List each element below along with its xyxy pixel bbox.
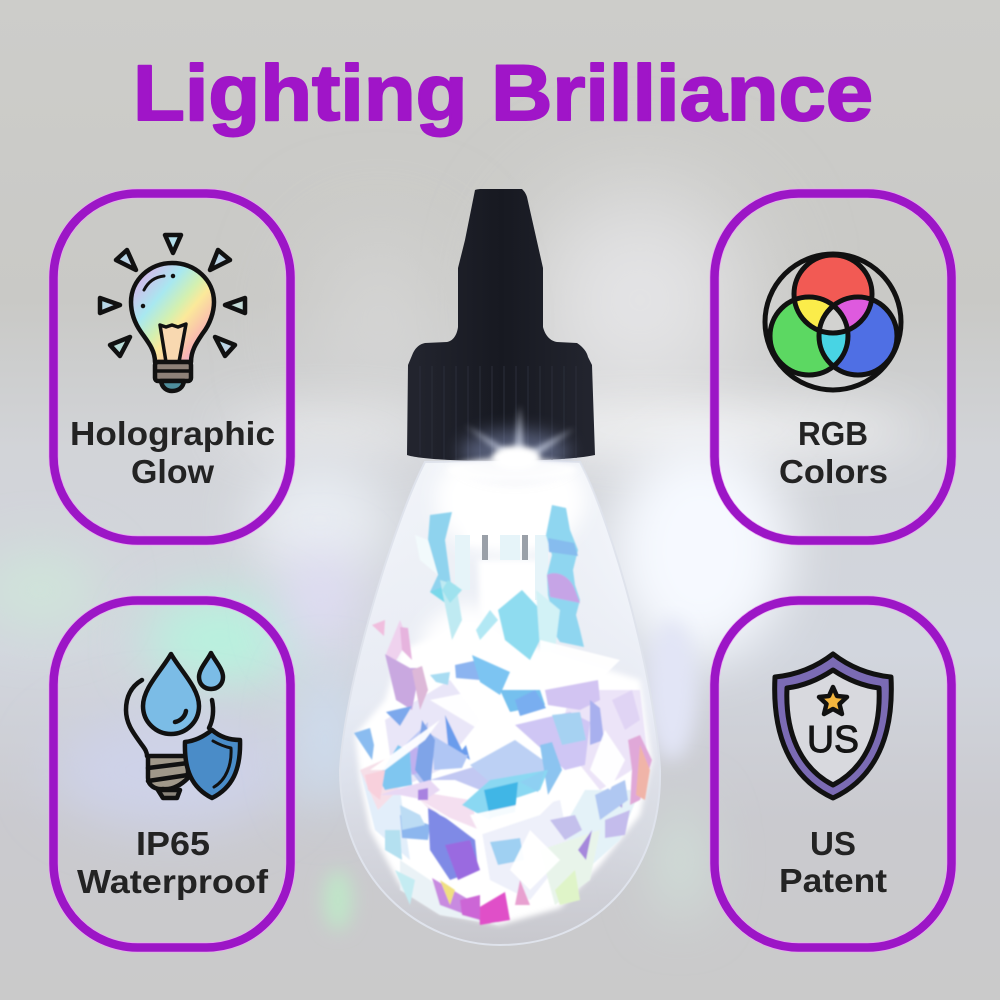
icon: RGB circles [765, 254, 901, 390]
panel: RGB colors [714, 194, 952, 540]
label: Holographic [70, 415, 275, 452]
label: IP65 [136, 825, 210, 862]
icon: waterproof bulb [126, 653, 240, 798]
LED pins [482, 535, 488, 560]
LED glare [447, 405, 577, 482]
icon: US shield: US [807, 719, 859, 761]
white highlight streaks [370, 640, 625, 890]
wavy strip [546, 505, 584, 647]
right side [620, 804, 623, 808]
bulb photo [340, 189, 660, 945]
glass bulb [340, 462, 660, 945]
panel: IP65 waterproof: Waterproof [77, 863, 269, 900]
panel: US patent [714, 600, 952, 948]
top centre flakes [497, 590, 540, 660]
lower purple and magenta [428, 808, 478, 880]
pale facets [385, 680, 480, 790]
title: Lighting Brilliance [133, 48, 873, 137]
label: US [810, 825, 856, 862]
panel: holographic glow: Glow [131, 453, 214, 490]
upper left pink-lilac [386, 621, 403, 660]
icon: US shield [775, 654, 891, 798]
icon: holographic bulb [100, 235, 245, 391]
centre flakes [455, 660, 480, 680]
panel: IP65 waterproof [54, 600, 290, 948]
panel: US patent: Patent [779, 862, 887, 899]
panel: RGB colors: Colors [779, 453, 888, 490]
left strip [428, 512, 452, 604]
holographic flakes [354, 445, 652, 925]
panel: holographic glow [54, 194, 290, 540]
black cap [407, 189, 595, 461]
label: RGB [798, 415, 868, 452]
